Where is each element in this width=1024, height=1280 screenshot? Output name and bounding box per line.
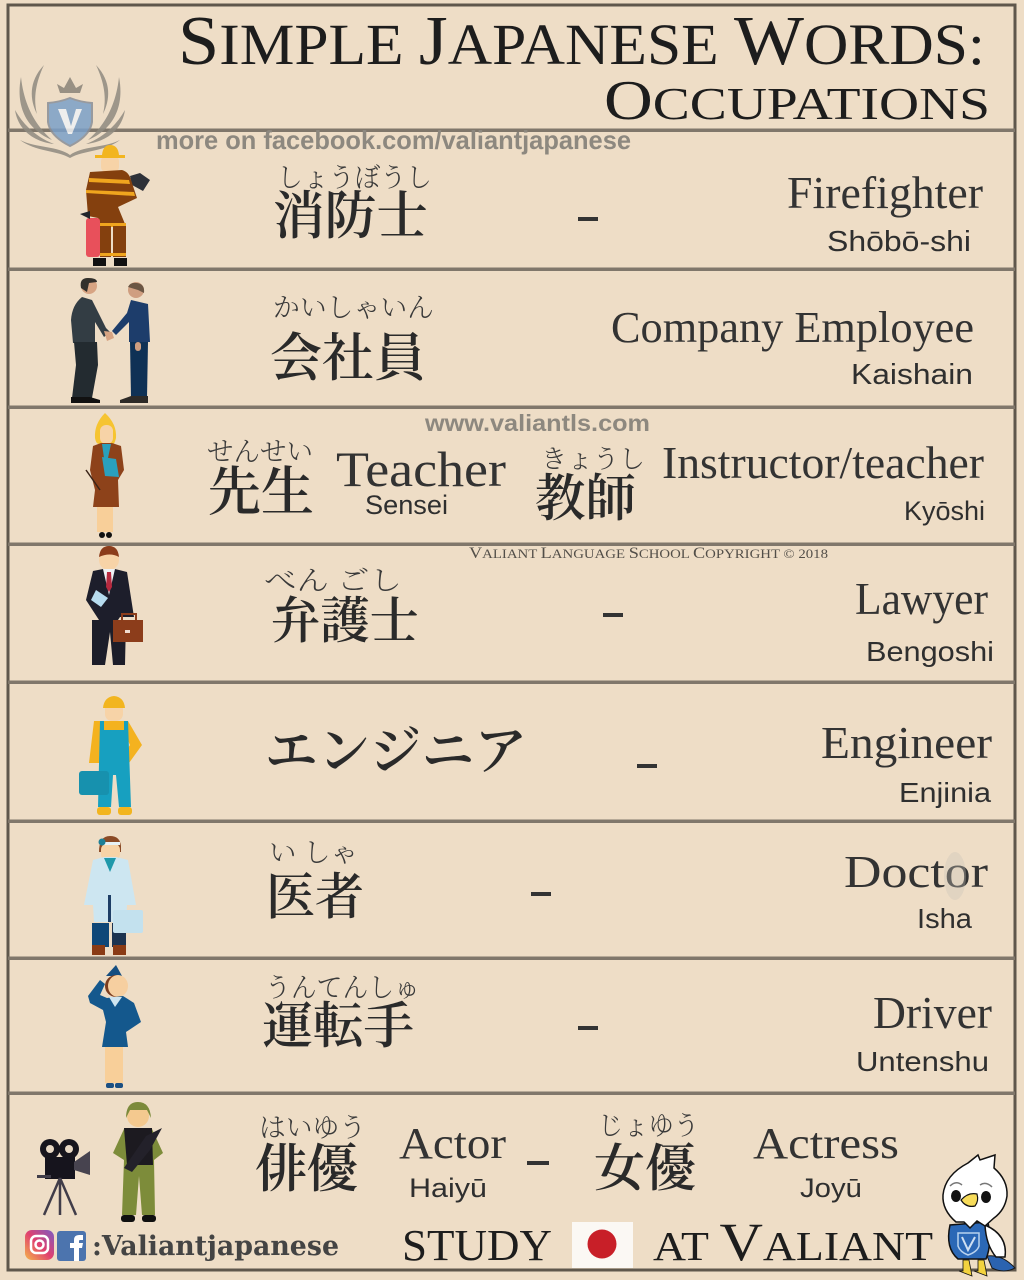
english: Driver: Driver: [873, 987, 992, 1038]
kanji: actor: 俳優: [255, 1141, 358, 1199]
panel: actor and actress row: [37, 1102, 899, 1222]
dash: [603, 613, 623, 617]
romaji: Shobo-shi: Shōbō-shi: [827, 226, 971, 258]
kanji: actress: 女優: [594, 1141, 696, 1198]
romaji: Haiyu: Haiyū: [409, 1173, 487, 1203]
watermark: website: www.valiantls.com: [424, 410, 650, 436]
english: Teacher: Teacher: [336, 441, 506, 497]
furigana: kaishain: かいしゃいん: [273, 293, 434, 323]
icon: firefighter: [80, 145, 150, 266]
english: Engineer: Engineer: [821, 717, 992, 768]
kanji: lawyer: 弁護士: [271, 593, 419, 649]
panel: driver row: [88, 965, 992, 1088]
romaji: Sensei: Sensei: [365, 490, 448, 520]
dash: [527, 1161, 549, 1165]
furigana: sensei: せんせい: [207, 437, 313, 467]
dash: [578, 217, 598, 221]
furigana: haiyu: はいゆう: [259, 1113, 366, 1143]
dash: [578, 1026, 598, 1030]
kanji: driver: 運転手: [262, 998, 414, 1054]
dash: [531, 892, 551, 896]
footer slogan: study: STUDY: [402, 1221, 552, 1270]
kanji: teacher: 先生: [208, 464, 314, 522]
kanji: company employee: 会社員: [270, 331, 426, 388]
romaji: Bengoshi: Bengoshi: [866, 636, 994, 667]
title: OCCUPATIONS: [604, 70, 990, 132]
romaji: Untenshu: Untenshu: [856, 1046, 989, 1077]
romaji: Enjinia: Enjinia: [899, 777, 991, 808]
panel: lawyer row: [86, 546, 994, 667]
mascot: eagle: [943, 1155, 1015, 1276]
icon: movie camera: [37, 1139, 90, 1215]
icon: driver in uniform: [88, 965, 141, 1088]
english: Doctor: Doctor: [844, 846, 988, 897]
icon: engineer: [79, 696, 142, 815]
kanji: doctor: 医者: [266, 869, 364, 925]
icon: instagram: [25, 1230, 54, 1260]
kanji: firefighter: 消防士: [273, 189, 428, 246]
furigana: bengoshi: べん ごし: [264, 566, 402, 596]
social handle: :Valiantjapanese: [92, 1231, 339, 1262]
romaji: Kyoshi: Kyōshi: [904, 496, 985, 526]
romaji: Isha: Isha: [917, 903, 972, 934]
kanji: instructor: 教師: [535, 472, 636, 528]
icon: teacher: [86, 413, 124, 538]
dash: [637, 764, 657, 768]
icon: Japanese flag: [572, 1222, 633, 1268]
english: Instructor/teacher: Instructor/teacher: [662, 437, 984, 488]
watermark: facebook: more on facebook.com/valiantjapanese: [156, 125, 631, 155]
english: Firefighter: Firefighter: [787, 167, 983, 218]
logo: Valiant crest: [15, 65, 125, 158]
icon: two businessmen shaking hands: [71, 278, 150, 403]
furigana: shobo-shi: しょうぼうし: [277, 163, 432, 193]
furigana: kyoshi: きょうし: [541, 445, 645, 474]
english: Actor: Actor: [399, 1119, 506, 1168]
panel: company employee row: [71, 278, 974, 403]
english: Company Employee: Company Employee: [611, 303, 974, 352]
footer slogan: at Valiant: AT VALIANT: [653, 1212, 933, 1272]
title: SIMPLE JAPANESE WORDS:: [178, 3, 985, 80]
furigana: isha: い しゃ: [269, 838, 358, 868]
english: Actress: Actress: [753, 1119, 899, 1168]
watermark: copyright: VALIANT LANGUAGE SCHOOL COPYRIGHT © 2018: [469, 545, 828, 562]
icon: actor as soldier: [113, 1102, 163, 1222]
romaji: Kaishain: Kaishain: [851, 359, 973, 391]
panel: firefighter row: [80, 145, 983, 266]
icon: doctor: [84, 836, 143, 955]
panel: engineer row: [79, 696, 992, 815]
romaji: Joyu: Joyū: [800, 1173, 862, 1203]
furigana: joyu: じょゆう: [598, 1111, 699, 1141]
english: Lawyer: Lawyer: [855, 573, 988, 624]
title: [178, 3, 990, 132]
panel: teacher and instructor row: [86, 413, 985, 538]
icon: lawyer: [86, 546, 143, 665]
furigana: untenshu: うんてんしゅ: [265, 973, 420, 1003]
panel: doctor row: [84, 836, 988, 955]
text: Japanese word engineer: エンジニア: [265, 723, 527, 781]
icon: facebook: [57, 1231, 86, 1261]
